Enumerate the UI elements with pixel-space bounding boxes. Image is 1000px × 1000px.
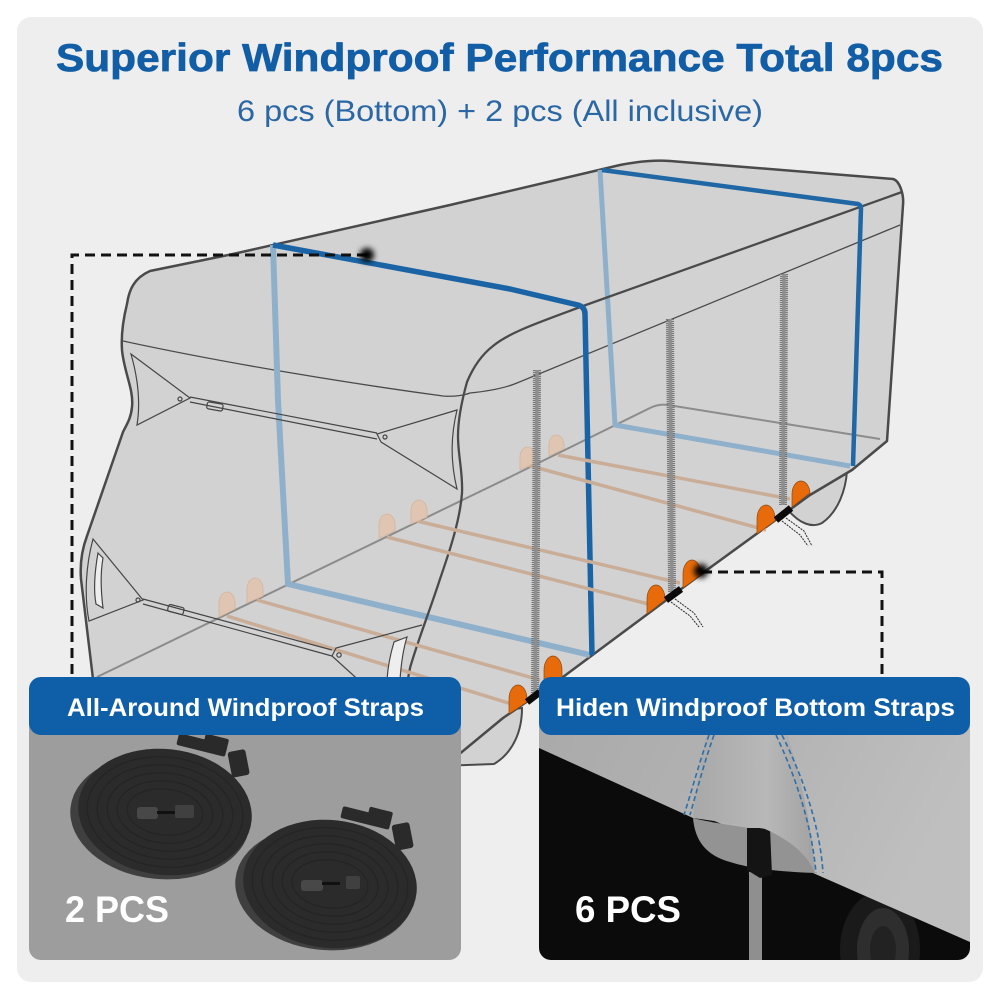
faded strap anchors [219,435,564,617]
vertical strap [748,871,762,960]
callout dot left [360,248,374,262]
zipper rods [535,274,784,697]
front upper strap [131,354,457,489]
strap coil one [64,727,258,888]
blue top strap rear [602,170,861,466]
callout dot right [694,564,708,578]
photo background [29,700,461,960]
floor line [97,405,880,677]
panel: all-around straps [29,677,461,960]
photo background [539,700,970,960]
photo contents [539,723,970,960]
front lower strap [86,539,422,695]
blue stitching [684,735,823,873]
count label: 6 PCS [575,889,681,930]
callout dashed leader right [702,572,882,678]
black strap clips [527,508,791,702]
loose strap tails [671,518,812,627]
fabric flap underside [693,818,815,873]
fabric fold [693,750,814,871]
cover body [81,161,903,770]
panel header [29,677,461,735]
RV cover illustration [81,161,903,770]
rear wheel skirt [788,470,847,525]
pale bottom straps [227,455,790,706]
count label: 2 PCS [65,889,169,930]
subtitle: 6 pcs (Bottom) + 2 pcs (All inclusive) [237,95,763,128]
tyre and wheel [840,896,920,960]
bottom edge anchor tabs [509,481,810,714]
strap coil two [229,800,423,959]
pale strap rear [600,170,850,466]
blue top strap front [273,245,592,655]
panel: hidden bottom straps [539,677,970,960]
callout dashed leader left [72,255,367,680]
panel header: All-Around Windproof Straps [67,694,424,722]
panel header [539,677,970,735]
pale strap front [273,245,590,655]
front wheel skirt [440,708,522,766]
flap strap buckle [747,828,772,878]
side seam line [123,225,900,396]
title: Superior Windproof Performance Total 8pcs [56,37,943,80]
panel header: Hiden Windproof Bottom Straps [556,694,955,722]
body edge curve [404,192,902,700]
fabric sheet [539,723,970,942]
